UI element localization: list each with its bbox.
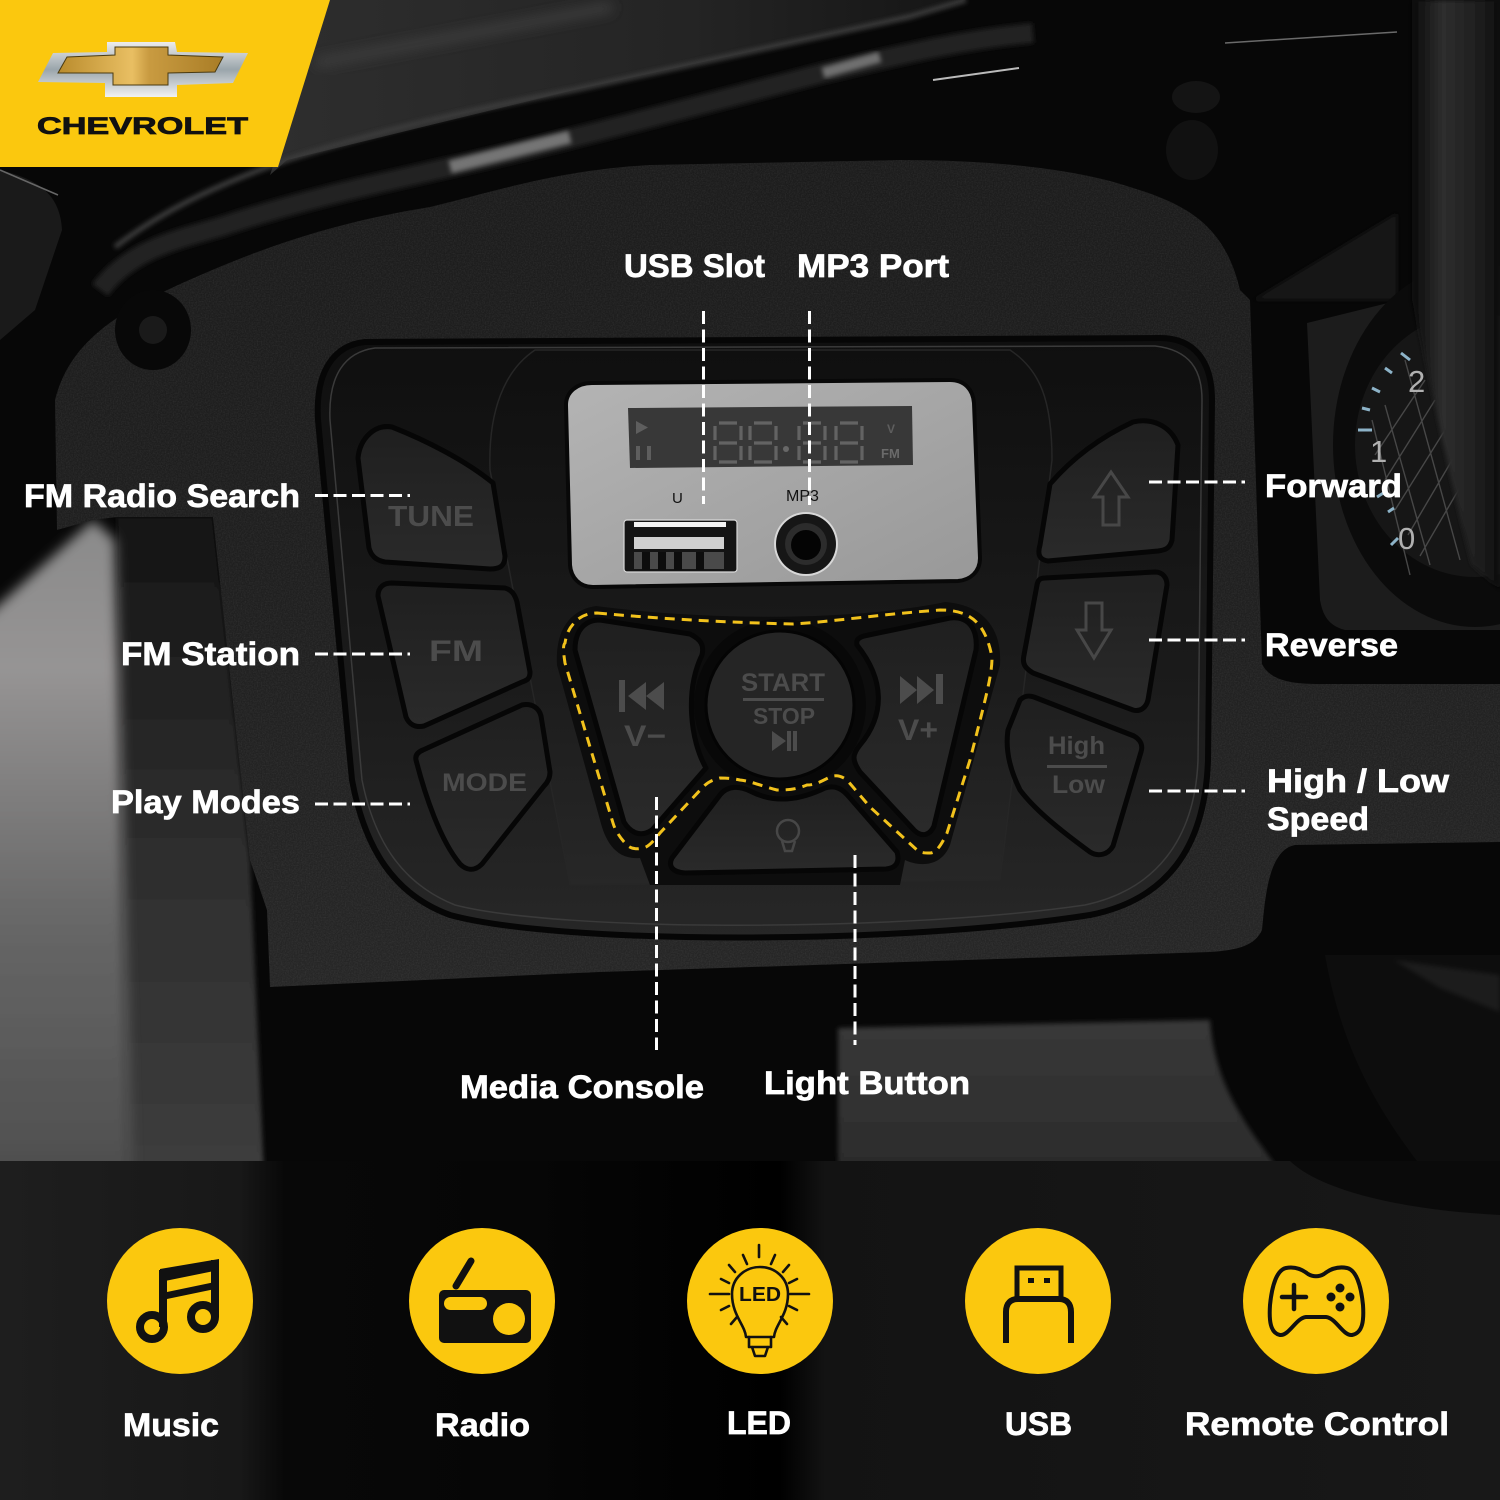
next / V+ button: [854, 618, 976, 835]
screws: [115, 81, 1220, 370]
icon: LED bulb: LED: [739, 1284, 781, 1306]
brand tab: [0, 0, 330, 167]
callout: High / Low Speed: [1149, 763, 1449, 837]
callout: High / Low Speed: Speed: [1267, 801, 1369, 837]
next / V+ button: V+: [898, 714, 938, 747]
Chevrolet bowtie logo: [38, 42, 248, 97]
gauge cluster housing: [1307, 263, 1500, 630]
yellow dashed highlight: [564, 610, 992, 853]
band backdrop: [0, 1161, 1500, 1500]
gauge numbers: 0: [1398, 521, 1415, 556]
feature: LED: [687, 1228, 833, 1441]
display plate: [566, 380, 980, 587]
High / Low button: [1007, 696, 1142, 855]
MP3 label: MP3: [786, 488, 819, 505]
LCD screen: [628, 406, 913, 468]
console rim highlight: [330, 346, 1202, 925]
TUNE button: TUNE: [388, 501, 474, 533]
U label: U: [672, 490, 683, 507]
start/stop button: START: [741, 669, 825, 697]
icon: game controller: [1270, 1267, 1363, 1335]
feature: Remote Control: [1185, 1228, 1449, 1442]
feature: Radio: [409, 1228, 555, 1443]
gauge numbers: [1370, 364, 1425, 556]
console inner center plate: [490, 350, 1052, 885]
callout: Reverse: Reverse: [1265, 627, 1398, 663]
callout: FM Radio Search: FM Radio Search: [24, 478, 300, 514]
feature: Remote Control: Remote Control: [1185, 1406, 1449, 1442]
left pillar: shaded section: [117, 517, 265, 1200]
High / Low button: High: [1048, 732, 1105, 760]
main textured dash panel: [55, 160, 1500, 987]
gauge numbers: 1: [1370, 434, 1387, 469]
media control console: [318, 338, 1212, 938]
feature: Music: [107, 1228, 253, 1443]
console body: [318, 338, 1212, 938]
callout: Light Button: Light Button: [764, 1065, 970, 1101]
start/stop button: STOP: [753, 703, 815, 729]
icon: LED bulb: [710, 1245, 809, 1356]
callout: Media Console: Media Console: [460, 1069, 704, 1105]
icon: music notes: [140, 1259, 219, 1339]
Forward button: [1039, 421, 1178, 561]
start/stop button: [694, 619, 866, 791]
feature: USB: [965, 1228, 1111, 1442]
feature: LED: LED: [727, 1405, 791, 1441]
previous / V- button: [575, 620, 706, 834]
steering wheel: [1412, 0, 1500, 590]
TUNE button: [358, 427, 505, 569]
callout: Forward: Forward: [1265, 468, 1402, 504]
High / Low button: Low: [1052, 771, 1106, 799]
panel grain: [55, 160, 1500, 987]
feature: Radio: Radio: [435, 1407, 530, 1443]
previous / V- button: V−: [624, 720, 666, 753]
yellow corner tab: [0, 0, 330, 167]
icon: radio: [439, 1261, 531, 1343]
FM button: FM: [429, 635, 483, 668]
USB port: [624, 520, 737, 572]
media button cluster: [557, 602, 1000, 885]
MODE button: MODE: [442, 769, 527, 797]
FM button: [378, 583, 530, 727]
icon: USB plug: [1006, 1268, 1071, 1343]
callout: FM Station: FM Station: [121, 636, 300, 672]
feature band: [0, 1161, 1500, 1500]
upper windshield area: [0, 0, 1397, 340]
lower floor area: [838, 955, 1500, 1185]
LCD screen: FM: [881, 446, 900, 461]
LCD screen: V: [887, 422, 895, 436]
callout: Play Modes: Play Modes: [111, 784, 300, 820]
cluster recess: [557, 602, 1000, 885]
Chevrolet wordmark: CHEVROLET: [37, 113, 248, 140]
gauge numbers: 2: [1408, 364, 1425, 399]
Reverse button: [1023, 572, 1167, 711]
callout: USB Slot: USB Slot: [624, 248, 765, 284]
callout: High / Low Speed: High / Low: [1267, 763, 1449, 799]
callout: MP3 Port: MP3 Port: [797, 248, 949, 284]
left pillar: bright door edge: [0, 520, 133, 1200]
audio jack: [774, 512, 838, 576]
feature: Music: Music: [123, 1407, 219, 1443]
MODE button: [416, 705, 550, 869]
feature: USB: USB: [1005, 1406, 1072, 1442]
light button: [671, 787, 898, 873]
